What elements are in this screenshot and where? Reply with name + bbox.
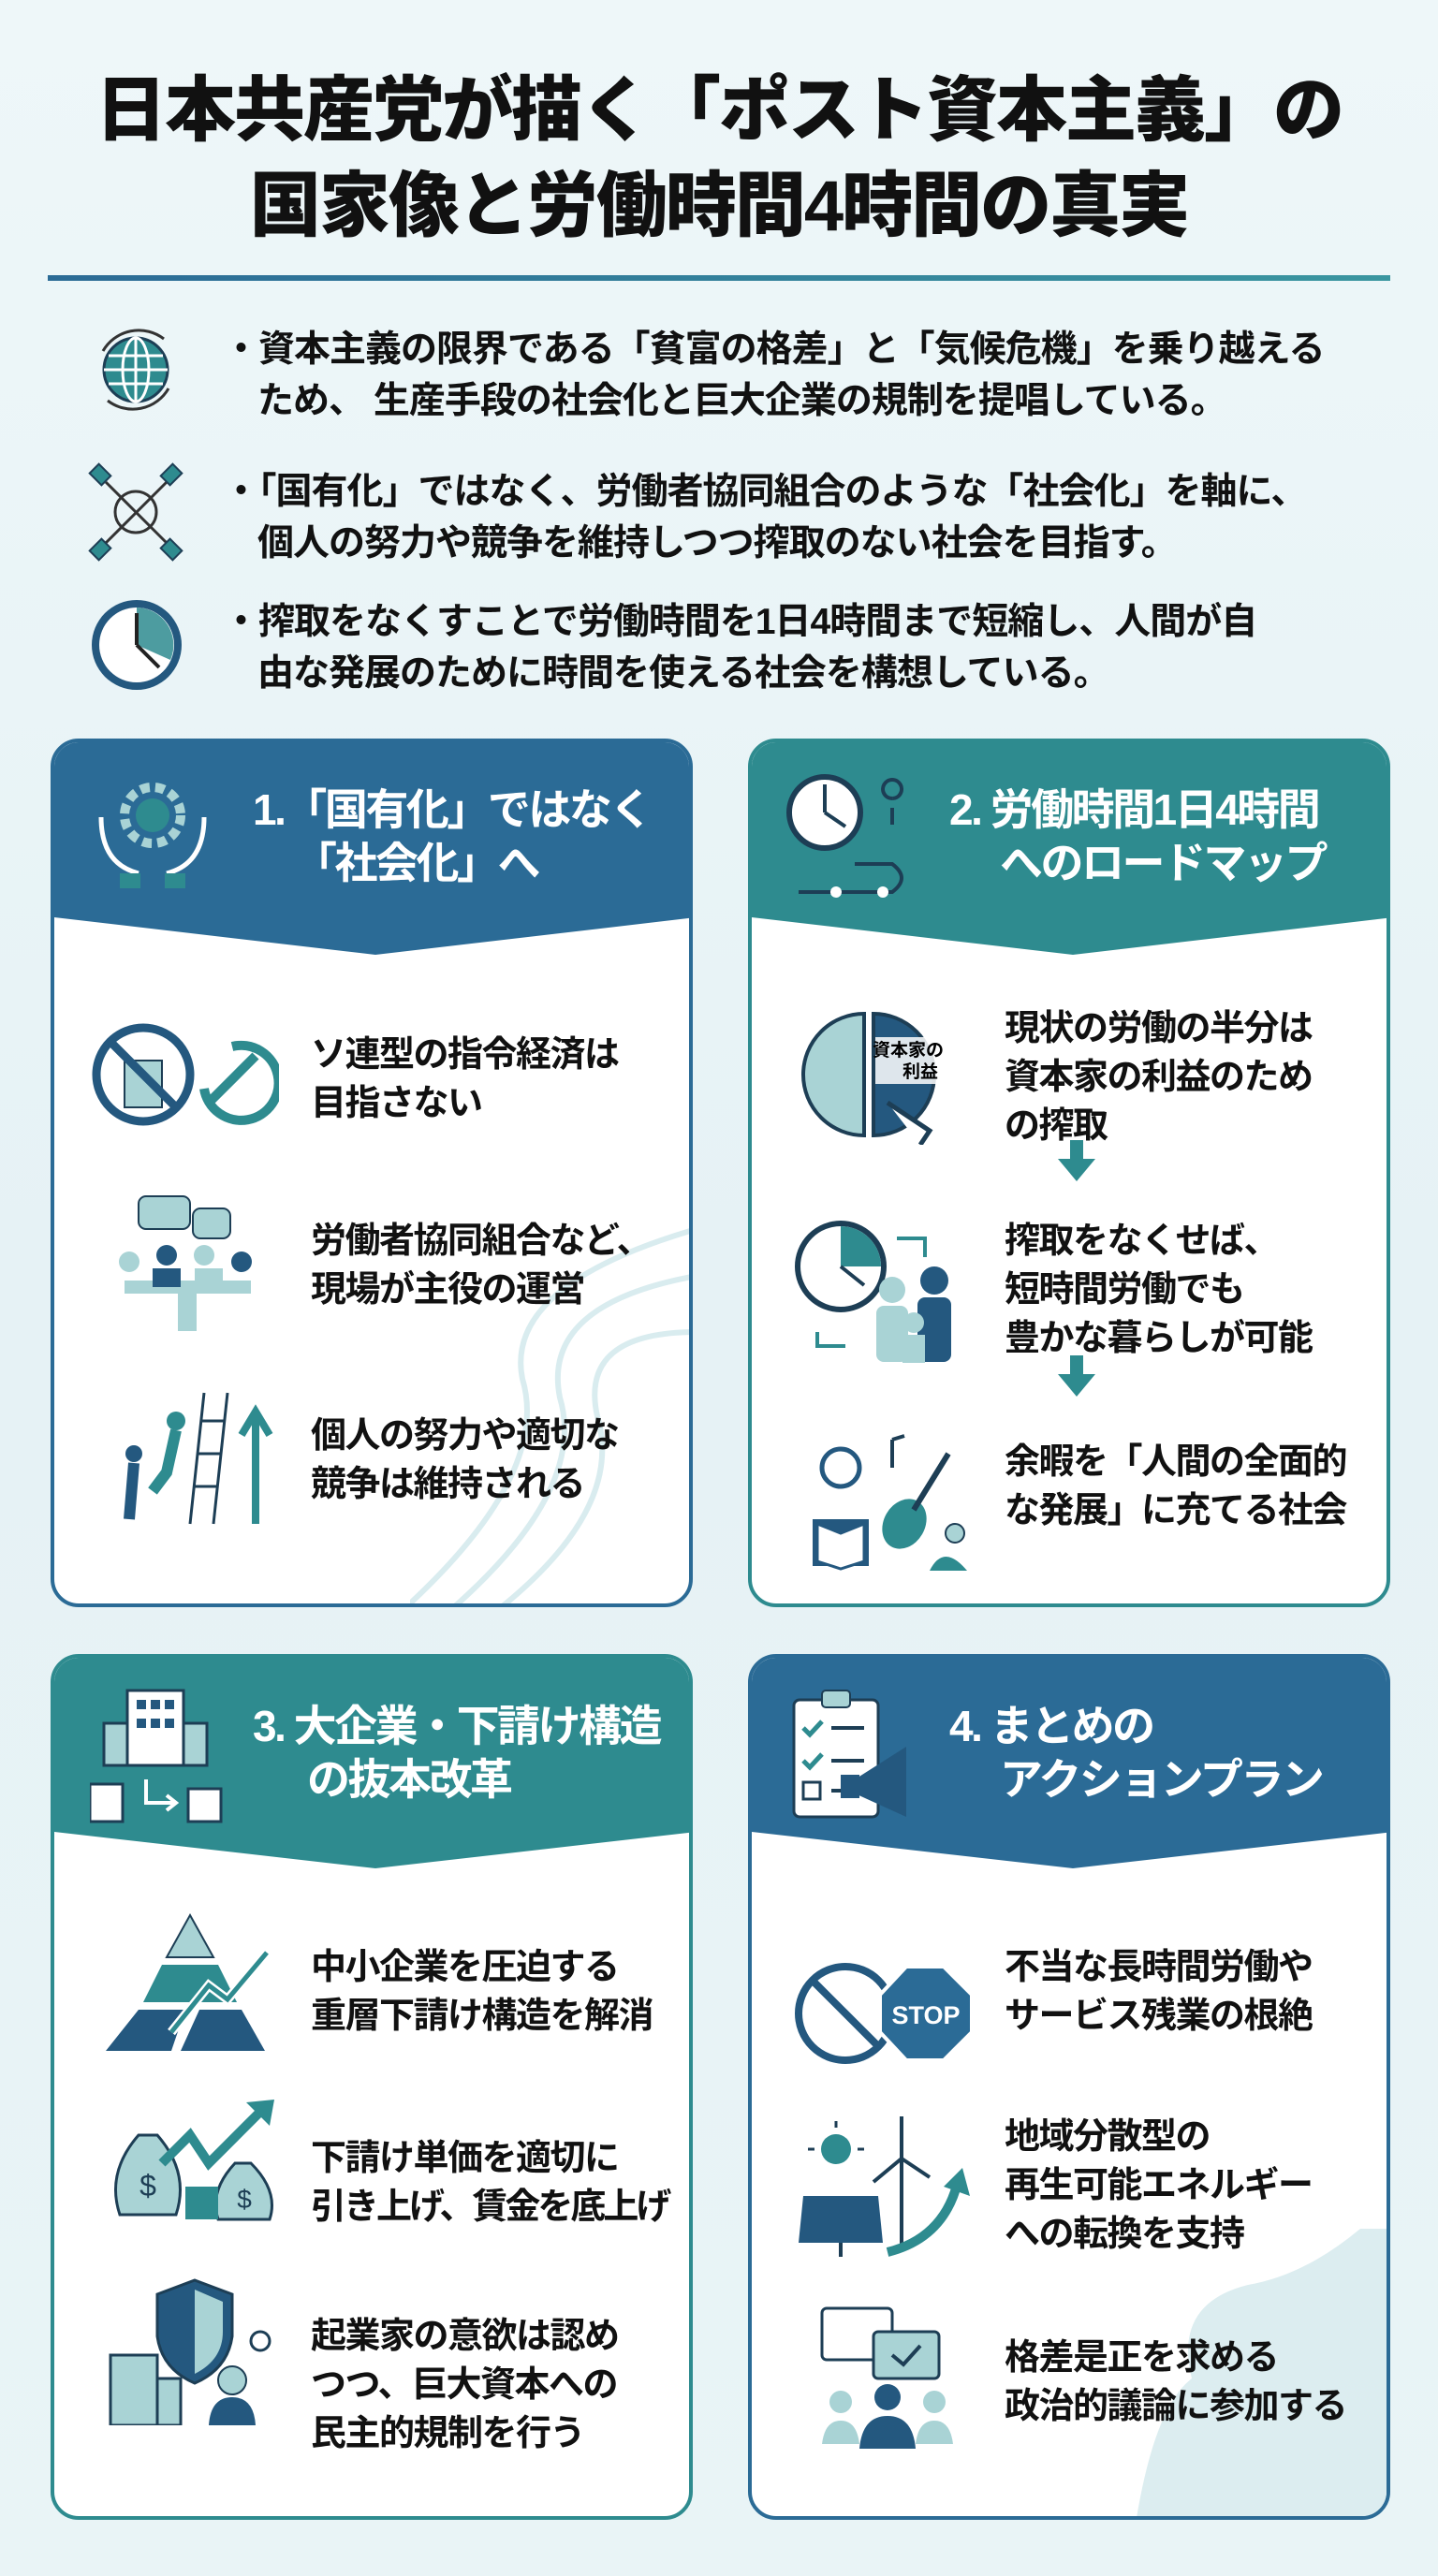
- icon: globe: [101, 329, 170, 411]
- panel 4: への転換を支持: [1005, 2215, 1244, 2254]
- item: effort and competition: [124, 1393, 273, 1524]
- panel 2: [748, 739, 1390, 1607]
- panel 4: [748, 1654, 1390, 2520]
- header 2: [752, 742, 1387, 955]
- bullet 1: ・資本主義の限界である「貧富の格差」と「気候危機」を乗り越える: [223, 329, 1324, 370]
- header title 3: 3. 大企業・下請け構造: [253, 1702, 660, 1750]
- panel 2: 資本家の利益のため: [1005, 1058, 1313, 1097]
- panel 1: 労働者協同組合など、: [311, 1222, 651, 1261]
- title: 日本共産党が描く「ポスト資本主義」の: [95, 71, 1343, 151]
- panel 4: 政治的議論に参加する: [1005, 2387, 1346, 2426]
- item: renewable energy: [799, 2116, 970, 2257]
- item: half exploited: 資本家の: [873, 1036, 944, 1061]
- panel 2: 現状の労働の半分は: [1005, 1009, 1313, 1048]
- panel 3: つつ、巨大資本への: [311, 2365, 617, 2405]
- icon: gear in hands: [99, 783, 206, 888]
- item: pyramid: [106, 1913, 269, 2051]
- bullet 3: ・搾取をなくすことで労働時間を1日4時間まで短縮し、人間が自: [223, 602, 1256, 642]
- icon: clock: [92, 600, 182, 690]
- panel 2: な発展」に充てる社会: [1005, 1491, 1346, 1530]
- icon: checklist megaphone: [792, 1690, 906, 1818]
- panel 2: 余暇を「人間の全面的: [1005, 1442, 1346, 1482]
- header title 3: [253, 1702, 661, 1804]
- panel 4: 地域分散型の: [1005, 2117, 1210, 2157]
- item: leisure: [813, 1434, 967, 1571]
- header title 2: へのロードマップ: [1000, 839, 1326, 887]
- title: 国家像と労働時間4時間の真実: [250, 167, 1188, 246]
- panel 4: サービス残業の根絶: [1005, 1997, 1313, 2036]
- bullet 1: ため、 生産手段の社会化と巨大企業の規制を提唱している。: [257, 381, 1226, 421]
- item: no command economy: [92, 1024, 279, 1125]
- arrow down 2: [1058, 1374, 1095, 1397]
- panel 2: 豊かな暮らしが可能: [1005, 1319, 1313, 1358]
- bullet 2: ・「国有化」ではなく、労働者協同組合のような「社会化」を軸に、: [223, 472, 1306, 512]
- bullet 2: [223, 472, 1306, 564]
- panel 1: 現場が主役の運営: [311, 1270, 584, 1310]
- header title 1: 「社会化」へ: [294, 839, 538, 887]
- panel 1: [51, 739, 693, 1607]
- panel 4: 不当な長時間労働や: [1005, 1948, 1313, 1987]
- panel 4: 格差是正を求める: [1005, 2338, 1278, 2378]
- item: half exploited: 利益: [902, 1058, 938, 1083]
- panel 1: ソ連型の指令経済は: [311, 1035, 619, 1075]
- title: [95, 71, 1343, 246]
- item: political discussion: [820, 2306, 953, 2449]
- bullet 2: 個人の努力や競争を維持しつつ搾取のない社会を目指す。: [257, 523, 1177, 564]
- icon: clock roadmap: [786, 774, 903, 898]
- item: cooperative: [119, 1195, 252, 1331]
- item: money bags: $: [237, 2185, 252, 2214]
- panel 2: の搾取: [1005, 1106, 1108, 1146]
- item: stop overtime: STOP: [891, 2001, 961, 2029]
- item: money bags: $: [139, 2169, 156, 2203]
- panel 2: 短時間労働でも: [1005, 1270, 1244, 1310]
- panel 3: [51, 1654, 693, 2520]
- item: half exploited: [801, 1012, 944, 1145]
- icon: joined hands: [88, 462, 183, 562]
- panel 3: 起業家の意欲は認め: [311, 2317, 619, 2356]
- item: stop overtime: [795, 1963, 970, 2064]
- item: family: [795, 1221, 951, 1363]
- header title 2: [949, 785, 1328, 887]
- header title 2: 2. 労働時間1日4時間: [949, 785, 1318, 834]
- header title 3: の抜本改革: [307, 1755, 511, 1804]
- header 4: [752, 1658, 1387, 1868]
- bullet 1: [223, 329, 1324, 421]
- header title 1: 1.「国有化」ではなく: [253, 785, 651, 834]
- panel 1: 個人の努力や適切な: [311, 1416, 619, 1456]
- panel 2: 搾取をなくせば、: [1005, 1222, 1278, 1261]
- arrow down 1: [1058, 1159, 1095, 1181]
- bullet 3: [223, 601, 1256, 694]
- header title 4: アクションプラン: [1000, 1755, 1322, 1804]
- panel 4: 再生可能エネルギー: [1005, 2166, 1313, 2205]
- header title 4: 4. まとめの: [949, 1702, 1153, 1750]
- item: money bags: [114, 2100, 274, 2220]
- panel 3: 重層下請け構造を解消: [311, 1997, 653, 2036]
- item: shield regulation: [109, 2278, 271, 2425]
- header 3: [54, 1658, 689, 1868]
- panel 3: 引き上げ、賃金を底上げ: [311, 2188, 668, 2227]
- panel 3: 下請け単価を適切に: [311, 2139, 619, 2178]
- panel 3: 民主的規制を行う: [311, 2414, 584, 2453]
- bullet 3: 由な発展のために時間を使える社会を構想している。: [257, 653, 1109, 694]
- icon: buildings: [90, 1689, 223, 1823]
- header title 1: [253, 785, 651, 887]
- panel 1: 競争は維持される: [311, 1465, 584, 1504]
- header 1: [54, 742, 689, 955]
- panel 3: 中小企業を圧迫する: [311, 1948, 619, 1987]
- header title 4: [949, 1702, 1322, 1804]
- panel 1: 目指さない: [311, 1084, 482, 1123]
